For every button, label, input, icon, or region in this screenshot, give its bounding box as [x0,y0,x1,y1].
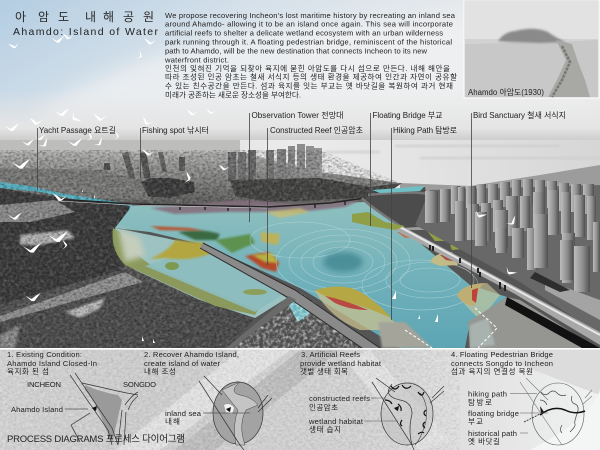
water contour ripples [250,222,478,310]
junction greenery [352,212,405,230]
callout: constructed reef: Constructed Reef 인공암초 [270,125,363,135]
step 4: floating bridge: 탐방로 [468,397,492,407]
description: korean: 수 있는 친수공간을 만든다. 섬과 육지를 잇는 부교는 옛 바닷길을 복원하여 과거 현재 [165,80,453,90]
pale field patches [0,200,75,222]
step 3: artificial reefs: 생태 습지 [309,424,341,434]
teal river on left [0,182,132,210]
south shore grey land [468,297,582,348]
callout: fishing spot: Fishing spot 낚시터 [142,126,209,135]
east residential towers [425,179,600,320]
step 1: existing condition [7,350,156,445]
photo caption: Ahamdo 아암도(1930) [468,87,544,97]
step 3: artificial reefs: 인공암초 [309,402,338,412]
north-east junction land [364,187,426,228]
description: korean: 미래가 공존하는 새로운 장소성을 부여한다. [165,89,301,99]
step 2: recover island: 내해 조성 [144,366,176,376]
step 1: existing condition: 1. Existing Condition: [7,350,82,359]
callout: constructed reef [268,125,363,265]
highway and shadow [57,186,600,358]
wetland islands [150,226,280,272]
callout: bird sanctuary: Bird Sanctuary 철새 서식지 [473,110,566,120]
left mid land [0,188,130,305]
historic photo inset [464,0,599,98]
description: korean: 따라 조성된 인공 암초는 철새 서식지 등의 생태 환경을 제공하여 인간과 자연이 공유할 [165,72,457,82]
korean title: 아암도내해공원 [15,10,154,24]
step 1: existing condition: 육지화 된 섬 [7,366,49,376]
east towers shadow ground [415,185,600,335]
step 4: floating bridge: floating bridge [468,409,519,418]
inland sea [115,202,507,348]
step 4: floating bridge: hiking path [468,390,507,398]
lower shore causeway [200,243,380,348]
land texture [0,150,400,348]
description: english [164,11,456,64]
distant high-rises [104,144,322,182]
callout: floating bridge [370,111,442,226]
sky background [0,0,600,180]
description: korean: 인천의 잊혀진 기억을 되찾아 육지에 묻힌 아암도를 다시 섬으로 만든다. 내해 해안을 [165,63,450,73]
photo island [498,29,566,43]
step 1: existing condition: SONGDO [123,380,156,389]
grey road strip [0,272,143,322]
main aerial rendering [0,140,600,358]
step 1: existing condition: INCHEON [27,380,61,389]
step 3: artificial reefs [300,350,444,450]
purple shore band [150,200,360,214]
callout: yacht passage [38,126,116,190]
step 4: floating bridge: 섬과 육지의 연결성 복원 [451,366,533,376]
step 3: artificial reefs: 갯벌 생태 회복 [300,366,348,376]
dark city cluster [140,178,195,198]
step 2: recover island: inland sea [165,409,202,418]
step 3: artificial reefs: constructed reefs [309,394,370,403]
photo causeway [548,40,590,97]
step 4: floating bridge: 4. Floating Pedestrian Bridge [451,350,553,359]
title [13,10,158,38]
panel aerial background [0,348,600,450]
yellow wash [265,208,310,218]
step 1: existing condition: Ahamdo Island [11,405,63,414]
far shore land [0,152,400,205]
callout: fishing spot [140,126,209,178]
flock of birds [5,33,518,301]
callout: observation tower: Observation Tower 전망대 [252,110,344,120]
description: english: artificial reefs to shelter a delicate wetland ecosystem with an urban wilderness [165,28,443,37]
step 3: artificial reefs: provide wetland habitat [300,359,382,368]
callout: observation tower [250,110,344,222]
speckled city below causeway [234,292,358,348]
shallows wash [378,322,432,348]
step 4: floating bridge: connects Songdo to Incheon [451,359,553,368]
step 1: existing condition: Ahamdo Island Closed-In [7,359,97,368]
step 2: recover island: 내해 [165,416,180,426]
callouts [38,110,566,320]
step 4: floating bridge [451,350,592,446]
callout: yacht passage: Yacht Passage 요트길 [39,126,116,135]
elevated pedestrian span [57,198,365,207]
step 4: floating bridge: historical path [468,429,517,438]
description: english: park running through it. A floating pedestrian bridge, reminiscent of the historical [165,37,452,46]
pale patch [65,298,105,318]
step 4: floating bridge: 옛 바닷길 [468,436,500,446]
process diagrams panel [0,348,600,450]
west wetland [112,228,287,318]
step 3: artificial reefs: wetland habitat [308,417,364,426]
description: english: path to Ahamdo, will be the new destination that connects Incheon to its new [165,46,428,55]
central dark shoreline [230,178,402,202]
callout: floating bridge: Floating Bridge 부교 [372,111,442,120]
mid land speckle band [0,168,150,200]
lower left farmland [0,278,255,348]
far right shore [400,165,600,230]
photo tidal flat [465,40,598,97]
step 2: recover island: 2. Recover Ahamdo Island, [144,350,239,359]
photo sky [465,1,598,39]
english title: Ahamdo: Island of Water [13,26,158,38]
description: english: around Ahamdo- allowing it to be an island once again. This sea will incorporate [165,20,453,29]
description: korean [165,63,457,99]
step 2: recover island: create island of water [144,359,220,368]
dashed walking path [405,308,497,348]
step 4: floating bridge: 부교 [468,417,483,426]
base ground [0,200,600,348]
step 3: artificial reefs: 3. Artificial Reefs [301,350,360,359]
constructed reefs [315,230,500,330]
step 2: recover island [144,350,272,450]
open sea on horizon [0,140,600,188]
callout: hiking path: Hiking Path 탐방로 [393,125,457,135]
section heading: PROCESS DIAGRAMS 프로세스 다이어그램 [7,433,185,445]
description: english: waterfront district. [164,56,229,64]
sail boats [82,189,438,343]
description: english: We propose recovering Incheon's lost maritime history by recreating an inland sea [165,11,456,20]
